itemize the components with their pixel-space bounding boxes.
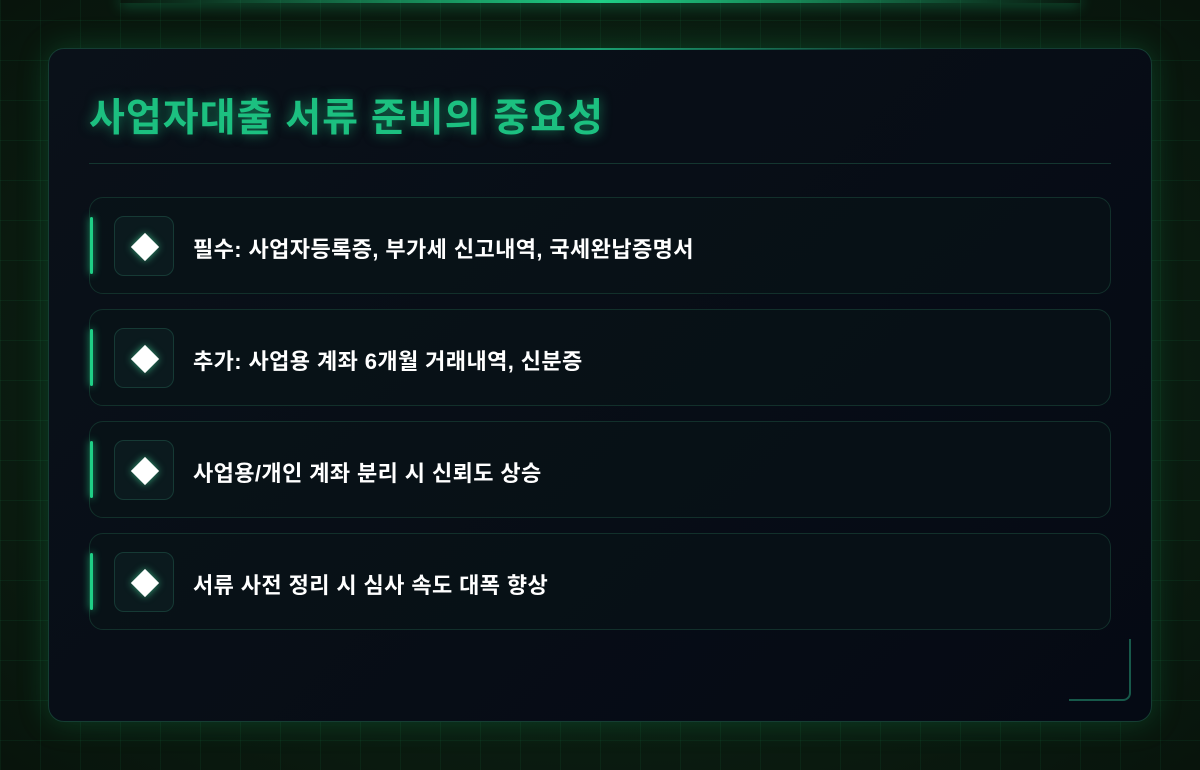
item 1: 필수: 사업자등록증, 부가세 신고내역, 국세완납증명서: [193, 237, 694, 262]
item 2: 추가: 사업용 계좌 6개월 거래내역, 신분증: [193, 349, 583, 374]
item 4: 서류 사전 정리 시 심사 속도 대폭 향상: [193, 573, 548, 598]
item 2: [89, 309, 1111, 406]
title: 사업자대출 서류 준비의 중요성: [89, 97, 604, 140]
item 3: 사업용/개인 계좌 분리 시 신뢰도 상승: [193, 461, 542, 486]
item 4: [89, 533, 1111, 630]
item 1: [89, 197, 1111, 294]
item 3: [89, 421, 1111, 518]
